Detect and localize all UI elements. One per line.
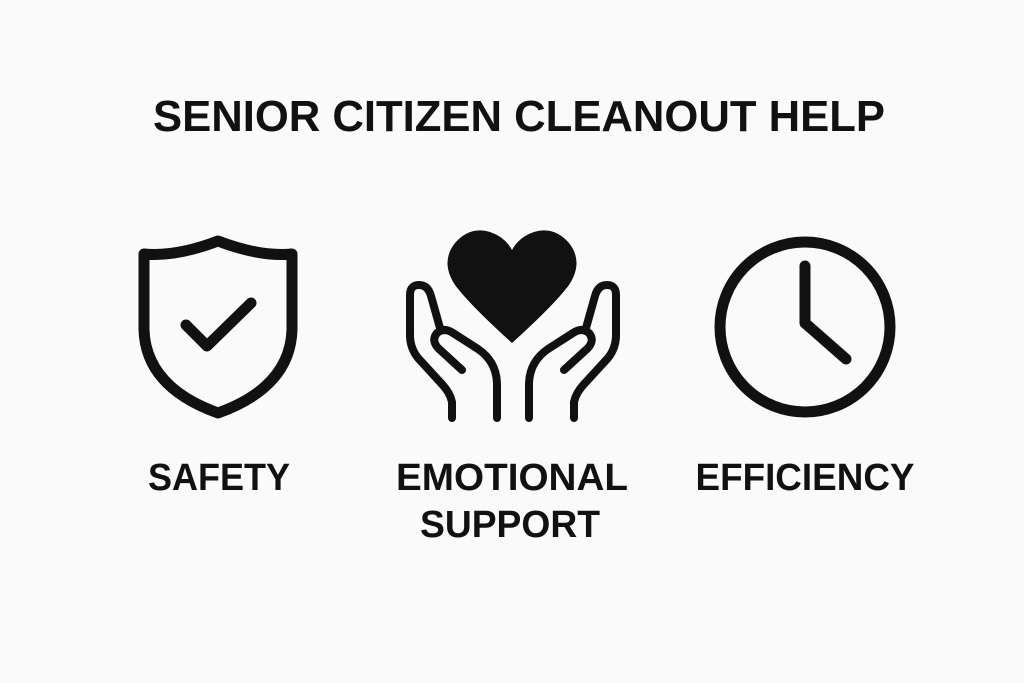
label: emotional support: SUPPORT	[420, 504, 600, 546]
icon: clock	[720, 242, 890, 412]
label: emotional support	[396, 457, 628, 546]
icon: shield with check	[144, 241, 292, 413]
right hand	[529, 285, 616, 418]
heart	[448, 230, 576, 343]
title: SENIOR CITIZEN CLEANOUT HELP	[153, 92, 885, 141]
label: efficiency: EFFICIENCY	[696, 457, 914, 499]
label: safety: SAFETY	[148, 457, 290, 499]
label: emotional support: EMOTIONAL	[396, 457, 628, 499]
left hand	[410, 285, 497, 418]
icon: hands holding heart	[410, 230, 616, 418]
